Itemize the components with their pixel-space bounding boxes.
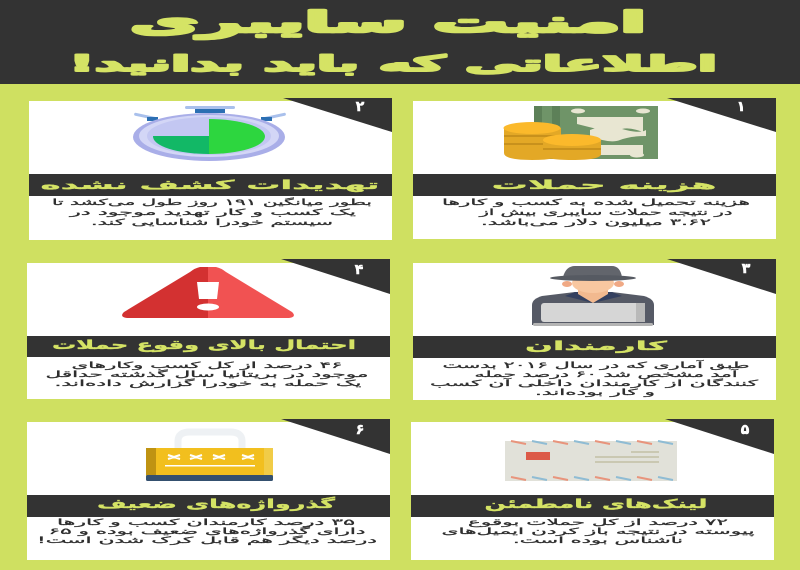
body text: ۳.۶۲ میلیون دلار می‌باشد.: [481, 218, 712, 228]
heading bar: [27, 495, 390, 517]
body text: دارای گذرواژه‌های ضعیف بوده و ۶۵: [48, 526, 366, 537]
body text: ۳۵ درصد کارمندان کسب و کارها: [57, 518, 356, 528]
body text: [442, 518, 756, 546]
body text: موجود در بریتانیا سال گذشته حداقل: [46, 369, 368, 380]
panel: employees: [413, 259, 776, 400]
title: امنیت سایبری: [130, 5, 646, 39]
icon: padlock with password: [146, 432, 273, 481]
body text: ۷۲ درصد از کل حملات بوقوع: [468, 518, 729, 528]
panel: undetected threats: [29, 98, 392, 240]
heading bar: لینک‌های نامطمئن: [484, 496, 708, 511]
body text: آمد مشخص شد ۶۰ درصد حمله: [475, 368, 739, 380]
heading bar: [29, 174, 392, 196]
panel: weak passwords: [27, 419, 390, 560]
corner ribbon 2: [283, 98, 392, 132]
body text: سیستم خودرا شناسایی کند.: [91, 218, 333, 228]
body text: یک کسب و کار تهدید موجود در: [67, 208, 358, 218]
heading bar: تهدیدات کشف نشده: [40, 177, 380, 192]
body text: هزینه تحمیل شده به کسب و کارها: [442, 198, 750, 208]
heading bar: احتمال بالای وقوع حملات: [52, 337, 356, 352]
heading bar: [413, 336, 776, 358]
icon: envelope: [505, 441, 677, 481]
body text: ۴۶ درصد از کل کسب وکارهای: [72, 361, 342, 371]
body text: یک حمله به خودرا گزارش داده‌اند.: [54, 378, 363, 389]
body text: [46, 361, 368, 389]
corner ribbon 1: [667, 98, 776, 132]
heading bar: [413, 174, 776, 196]
corner ribbon 1: ۱: [737, 99, 745, 115]
body text: در نتیجه حملات سایبری بیش از: [477, 208, 733, 218]
body text: بطور میانگین ۱۹۱ روز طول می‌کشد تا: [52, 197, 372, 208]
icon: warning triangle: [122, 267, 294, 318]
heading bar: هزینه حملات: [492, 177, 716, 192]
body text: پیوسته در نتیجه باز کردن ایمیل‌های: [442, 527, 756, 537]
icon: hooded employee at laptop: [532, 266, 654, 326]
header band: [0, 0, 800, 84]
panel: high attack probability: [27, 259, 390, 399]
heading bar: [27, 336, 390, 357]
corner ribbon 4: [281, 259, 390, 294]
heading bar: [411, 495, 774, 517]
subtitle: اطلاعاتی که باید بدانید!: [69, 52, 717, 77]
icon: stopwatch: [133, 106, 286, 161]
panel: untrusted links: [411, 419, 774, 560]
corner ribbon 3: ۳: [742, 261, 751, 277]
heading bar: کارمندان: [525, 338, 669, 353]
body text: طبق آماری که در سال ۲۰۱۶ بدست: [442, 359, 750, 371]
body text: [430, 359, 760, 398]
corner ribbon 6: ۶: [356, 422, 364, 438]
body text: درصد دیگر هم قابل کرک شدن است!: [37, 535, 378, 546]
panel: attack cost: [413, 98, 776, 239]
corner ribbon 5: [665, 419, 774, 454]
body text: [52, 197, 372, 228]
body text: کنندگان از کارمندان داخلی آن کسب: [430, 377, 760, 389]
corner ribbon 3: [667, 259, 776, 294]
heading bar: گذرواژه‌های ضعیف: [97, 496, 336, 511]
corner ribbon 2: ۲: [356, 99, 365, 115]
body text: [37, 518, 378, 546]
corner ribbon 4: ۴: [355, 262, 364, 278]
corner ribbon 5: ۵: [741, 422, 750, 438]
body text: ناشناس بوده است.: [513, 536, 683, 546]
corner ribbon 6: [281, 419, 390, 454]
body text: [442, 198, 750, 228]
body text: و کار بوده‌اند.: [535, 388, 655, 398]
icon: money and coins: [504, 106, 658, 160]
